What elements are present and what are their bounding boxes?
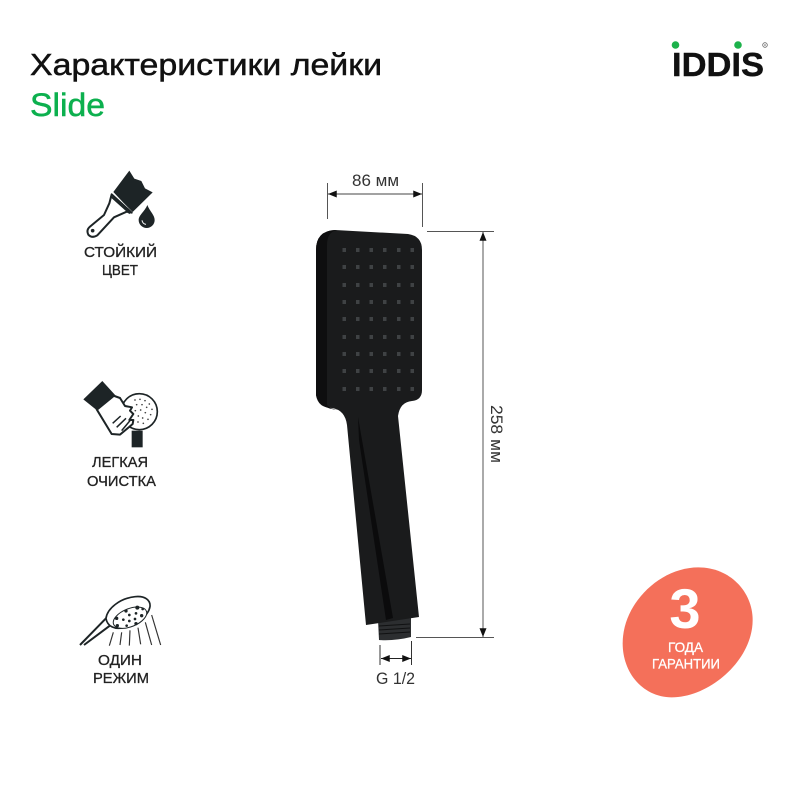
nozzles xyxy=(342,248,414,391)
label: один режим: ОДИН xyxy=(98,652,142,669)
title xyxy=(30,48,382,123)
label: легкая очистка: ЛЕГКАЯ xyxy=(92,454,148,471)
head and handle body xyxy=(316,230,422,625)
icon: hand cleaning shower head xyxy=(83,381,157,447)
dimension: G 1/2: G 1/2 xyxy=(376,669,415,688)
dimension: G 1/2 xyxy=(376,641,415,688)
dimension: width 86 mm xyxy=(328,172,422,227)
shower product xyxy=(316,230,422,640)
title: Slide xyxy=(30,87,105,123)
thread connector xyxy=(378,618,411,640)
title: Характеристики лейки xyxy=(30,48,382,82)
icon: paint brush and drop xyxy=(87,171,155,237)
dimension: height 258 mm: 258 мм xyxy=(487,405,505,463)
label: стойкий цвет: ЦВЕТ xyxy=(102,262,138,279)
icon: shower spray xyxy=(80,597,161,646)
warranty badge: ГАРАНТИИ xyxy=(652,656,720,672)
warranty badge: 3 xyxy=(669,577,701,640)
label: легкая очистка: ОЧИСТКА xyxy=(87,473,156,490)
warranty badge xyxy=(623,567,753,697)
label: стойкий цвет xyxy=(84,243,157,279)
logo: IDDIS: IDDIS xyxy=(672,47,764,84)
label: стойкий цвет: СТОЙКИЙ xyxy=(84,243,157,261)
label: один режим: РЕЖИМ xyxy=(93,670,149,687)
label: легкая очистка xyxy=(87,454,156,490)
label: один режим xyxy=(93,652,149,687)
warranty badge: ГОДА xyxy=(668,639,704,655)
dimension: height 258 mm xyxy=(416,232,505,638)
dimension: width 86 mm: 86 мм xyxy=(352,172,399,190)
